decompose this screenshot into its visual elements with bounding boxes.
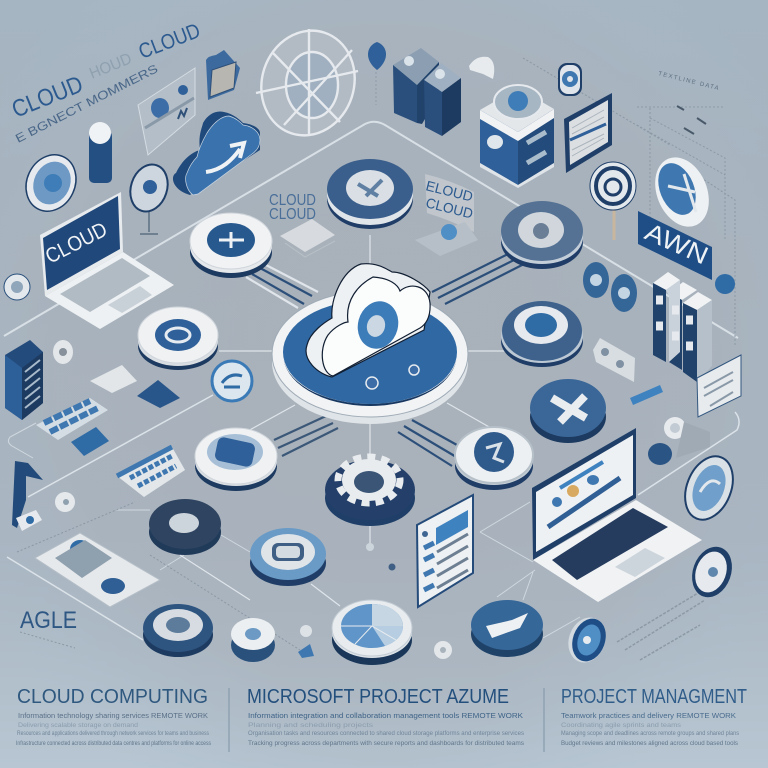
icon: blue cloud with arrow (173, 111, 260, 195)
icon: donut dial (17, 147, 85, 219)
node: gear disc (325, 457, 415, 526)
icon: small dark dial (685, 541, 739, 603)
sign: AWN (638, 211, 712, 280)
node: blue pie disc (332, 600, 412, 665)
icon: analytics card (117, 447, 185, 497)
icon: tablet document (564, 93, 612, 173)
network connection lines (4, 58, 739, 660)
dashed chart panel (637, 71, 725, 240)
title text: cloud project: CLOUD (136, 19, 204, 64)
icon: white 3d cloud (306, 264, 430, 377)
node: lower right disc (455, 427, 533, 490)
icon: slanted dashboard card (138, 68, 195, 155)
icon: small pins (298, 543, 452, 659)
text: cloud cloud label: CLOUD (269, 206, 316, 223)
node: light blue ring disc (250, 528, 326, 586)
column: cloud computing: Delivering scalable storage on demand (18, 722, 138, 729)
text: cloud cloud label (269, 192, 316, 223)
icon: folder (206, 50, 240, 100)
icon: left laptop (40, 192, 174, 329)
column: cloud computing: Information technology sharing services REMOTE WORK (18, 711, 208, 720)
column: microsoft project azure: Organisation tasks and resources connected to shared cloud storage platforms and enterprise services (248, 730, 525, 737)
divider (228, 688, 230, 752)
title text: cloud project: HOUD (87, 50, 134, 83)
icon: blue pin badge (368, 42, 386, 105)
icon: blue round arrow badge (212, 361, 252, 401)
node: top centre disc (327, 159, 413, 229)
column: microsoft project azure: Information integration and collaboration management tools REMOTE WORK (248, 711, 523, 720)
divider (543, 688, 545, 752)
icon: lollipop magnifier (124, 160, 174, 234)
icon: blue tag (630, 385, 663, 405)
dashed chart panel: TEXTLINE DATA (658, 71, 719, 92)
icons: small blue badges (583, 262, 735, 312)
node: small white disc (231, 618, 275, 662)
icon: blue lens (562, 612, 612, 668)
column: microsoft project azure: Tracking progress across departments with secure reports and dashboards for distributed teams (248, 740, 525, 747)
icon: small badge (558, 63, 582, 96)
icons: right small badges (648, 417, 742, 527)
icon: target sign (590, 162, 636, 240)
icon: left pen tool (12, 461, 75, 531)
node: middle left disc (138, 307, 218, 370)
icon: dashboard cards (36, 365, 180, 456)
icon: cylinder (89, 122, 112, 183)
text: agile label: AGLE (20, 607, 77, 634)
column: project management: Managing scope and deadlines across remote groups and shared plans (561, 730, 740, 737)
icon: paper stack (280, 219, 335, 257)
icon: blue cube with dial (480, 85, 554, 188)
title text: cloud project: CLOUD (8, 71, 87, 124)
node: lower left disc (195, 428, 277, 491)
text card: cloud label: ELOUD (424, 177, 475, 205)
title text: cloud project: E BGNECT MOMMERS (13, 61, 160, 146)
column: cloud computing: Infrastructure connected across distributed data centres and platforms for online access (16, 740, 212, 747)
node: middle right disc (501, 301, 583, 367)
icon: left server rack (5, 340, 43, 420)
text card: cloud label (415, 174, 478, 256)
column: cloud computing: Resources and applications delivered through network services for teams and business (17, 730, 210, 737)
central hub (272, 264, 468, 424)
thick connector bundles to hub (246, 252, 524, 466)
icon: right document sheet (697, 355, 741, 417)
column: project management: Teamwork practices and delivery REMOTE WORK (561, 711, 736, 720)
icon: dial dish (645, 149, 719, 235)
icon: small round marker (53, 340, 73, 364)
icon: wire globe (248, 18, 368, 148)
icon: isometric map sheet (35, 533, 160, 607)
title text: cloud project (8, 19, 204, 146)
column: microsoft project azure: MICROSOFT PROJECT AZUME (247, 686, 509, 708)
icon: row of binders (653, 272, 712, 382)
icon: white puzzle cloud (469, 57, 494, 79)
column: microsoft project azure: Planning and scheduling projects (248, 722, 374, 729)
node: upper right disc (501, 201, 583, 269)
icon: small round badge left (4, 274, 30, 300)
icon: small chip label (593, 338, 635, 382)
column: project management: Budget reviews and milestones aligned across cloud based tools (561, 740, 739, 747)
node: book disc (471, 600, 543, 657)
icon: server towers (393, 48, 461, 136)
text: cloud cloud label: CLOUD (269, 192, 316, 209)
column: project management (561, 686, 747, 747)
node: upper left disc (190, 213, 272, 278)
text card: cloud label: CLOUD (424, 194, 475, 222)
column: cloud computing: CLOUD COMPUTING (17, 686, 208, 708)
column: project management: Coordinating agile sprints and teams (561, 722, 682, 729)
icon: right laptop (532, 428, 702, 602)
sign: AWN: AWN (641, 218, 712, 270)
icon: tablet document (417, 495, 473, 607)
icon: left laptop: CLOUD (42, 218, 111, 268)
node: bottom left disc (143, 604, 213, 657)
column: cloud computing (16, 686, 212, 747)
column: microsoft project azure (247, 686, 525, 747)
node: dark photo disc (149, 499, 221, 555)
node: dark X disc (530, 379, 606, 443)
